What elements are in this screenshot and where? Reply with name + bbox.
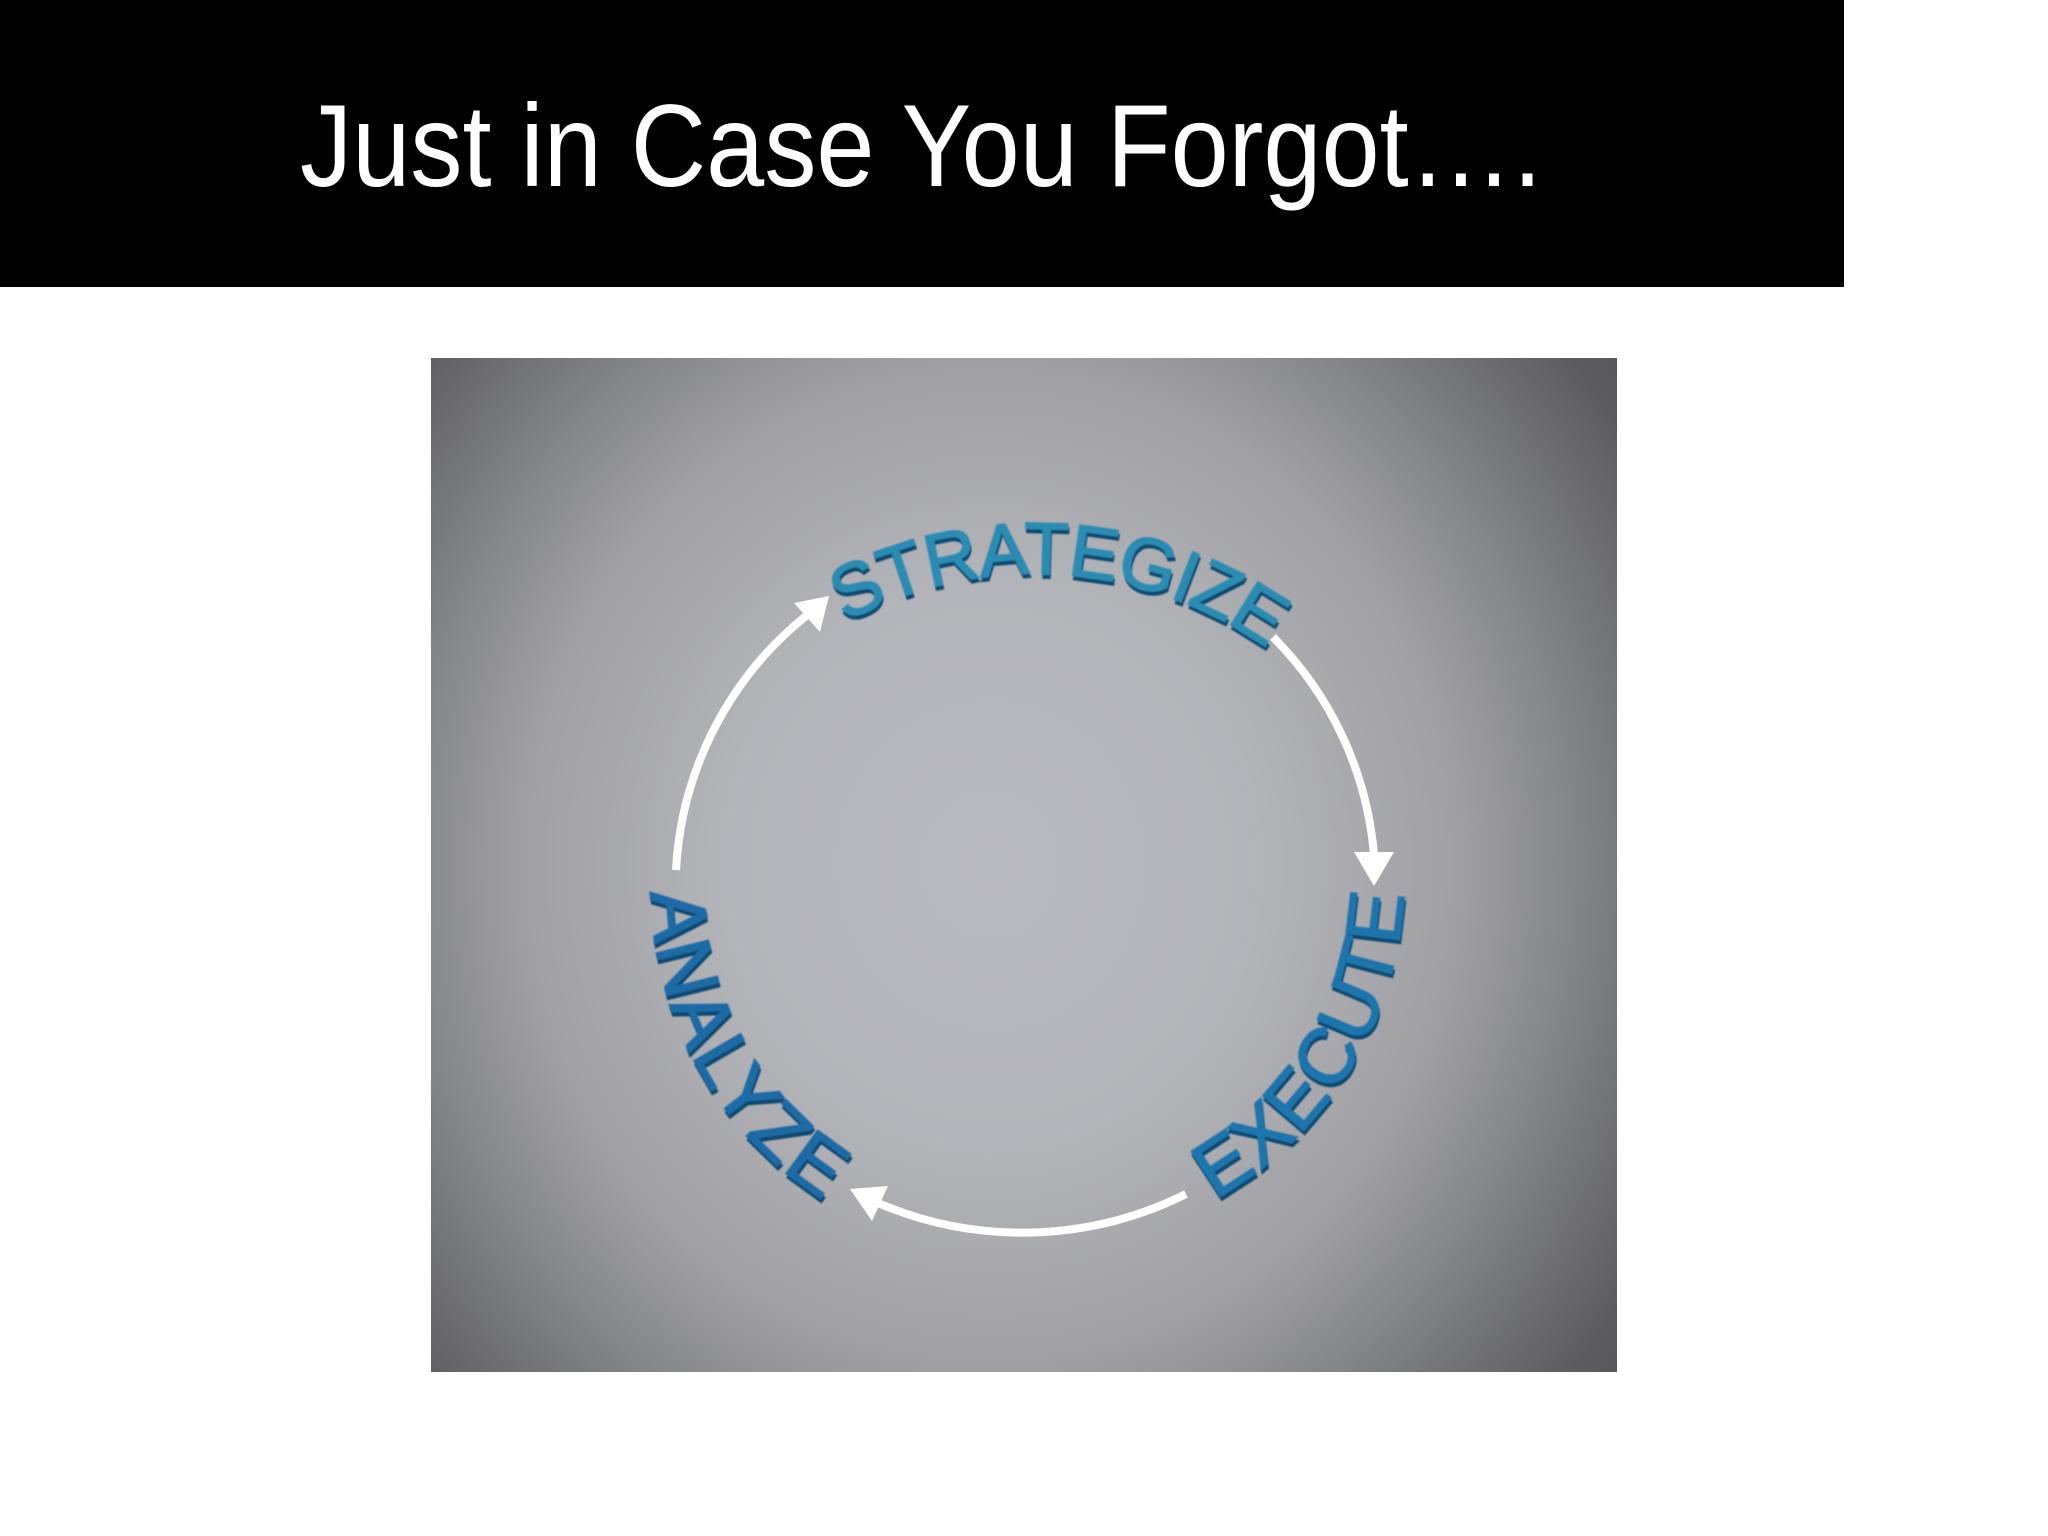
- panel: cycle diagram: [431, 358, 1617, 1372]
- label: strategize: STRATEGIZE: [830, 521, 1294, 652]
- arrow: analyze to strategize: [676, 596, 829, 870]
- arrow: strategize to execute: [1273, 637, 1394, 886]
- arrow: execute to analyze: [850, 1186, 1186, 1233]
- label: analyze: ANALYZE: [648, 890, 854, 1204]
- label: execute: EXECUTE: [1190, 891, 1408, 1202]
- title bar: [0, 0, 1844, 287]
- title: Just in Case You Forgot….: [300, 80, 1542, 211]
